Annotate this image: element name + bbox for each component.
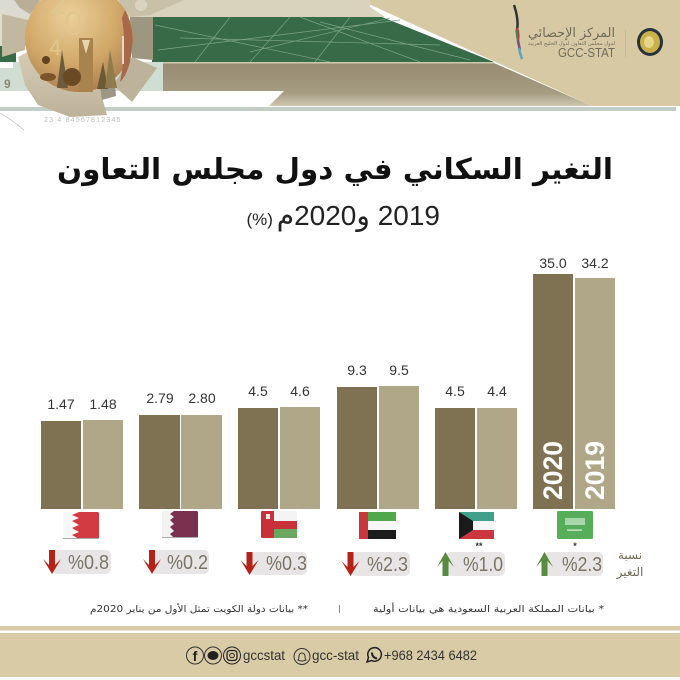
flag: Saudi Arabia bbox=[557, 511, 593, 539]
change: Oman bbox=[240, 552, 307, 575]
bar chart bbox=[41, 255, 615, 509]
bars: Oman: 4.6 bbox=[290, 383, 310, 399]
change: Qatar bbox=[143, 550, 209, 574]
asterisk: Kuwait: ** bbox=[475, 541, 483, 551]
bars: Kuwait: 4.4 bbox=[487, 383, 507, 399]
icon: facebook: f bbox=[193, 648, 198, 664]
footnote: Saudi Arabia: * بيانات المملكة العربية السعودية هي بيانات أولية bbox=[373, 602, 604, 615]
change: Bahrain bbox=[43, 550, 111, 574]
bars: Saudi Arabia: 35.0 bbox=[539, 255, 567, 271]
bars: Kuwait: 4.5 bbox=[445, 383, 465, 399]
change: Kuwait: %1.0 bbox=[463, 554, 503, 576]
flag: Qatar bbox=[162, 511, 198, 538]
change: Qatar: %0.2 bbox=[167, 552, 208, 574]
bars: UAE bbox=[337, 362, 419, 509]
header banner bbox=[0, 0, 680, 130]
bars: Bahrain: 1.47 bbox=[47, 396, 75, 412]
subtitle: 2019 و2020م (%) bbox=[247, 200, 440, 232]
icon: facebook bbox=[186, 647, 204, 664]
footer band bbox=[0, 633, 680, 677]
bars: Saudi Arabia bbox=[533, 255, 615, 509]
bars: Saudi Arabia: 34.2 bbox=[581, 255, 609, 271]
change rate label bbox=[616, 548, 643, 580]
asterisk: Saudi Arabia: * bbox=[573, 541, 577, 551]
logo: GCC-STAT: لدول مجلس التعاون لدول الخليج العربية bbox=[528, 41, 615, 47]
bars: Bahrain bbox=[41, 396, 123, 509]
logo: GCC-STAT: GCC-STAT bbox=[558, 45, 615, 60]
footnote: Kuwait: ** بيانات دولة الكويت تمثل الأول من يناير 2020م bbox=[90, 603, 308, 615]
bars: Bahrain: 1.48 bbox=[89, 396, 117, 412]
flag: Bahrain bbox=[63, 512, 99, 539]
bars: UAE: 9.5 bbox=[389, 362, 409, 378]
flag: UAE bbox=[359, 512, 396, 539]
bars: Qatar: 2.80 bbox=[188, 390, 216, 406]
change: Kuwait bbox=[437, 552, 505, 576]
change: Saudi Arabia bbox=[536, 552, 603, 576]
change rate label: نسبة bbox=[618, 548, 642, 562]
title: التغير السكاني في دول مجلس التعاون bbox=[57, 152, 613, 186]
bars: Kuwait bbox=[435, 383, 517, 509]
flag: Kuwait bbox=[459, 512, 494, 539]
year label 2019: 2019 bbox=[580, 441, 610, 500]
header banner: 0 bbox=[64, 5, 83, 43]
change rate label: التغير bbox=[616, 565, 643, 580]
header banner: 23 4 84567812345 bbox=[44, 117, 122, 124]
bars: Oman bbox=[238, 383, 320, 509]
change: Bahrain: %0.8 bbox=[68, 552, 109, 574]
bars: Oman: 4.5 bbox=[248, 383, 268, 399]
icon: snapchat bbox=[294, 648, 310, 664]
bars: Qatar: 2.79 bbox=[146, 390, 174, 406]
phone number: +968 2434 6482 bbox=[384, 647, 477, 663]
bars: Qatar bbox=[139, 390, 222, 509]
change: UAE: %2.3 bbox=[367, 554, 408, 576]
bars: UAE: 9.3 bbox=[347, 362, 367, 378]
handle: gcc-stat: gcc-stat bbox=[312, 647, 359, 663]
icon: instagram bbox=[224, 647, 240, 664]
header banner: 4 bbox=[49, 35, 61, 60]
header banner: 9 bbox=[4, 77, 11, 91]
handle: gccstat: gccstat bbox=[243, 647, 285, 663]
change: Oman: %0.3 bbox=[266, 553, 307, 575]
logo: GCC-STAT: المركز الإحصائي bbox=[528, 26, 615, 41]
change: UAE bbox=[342, 552, 410, 576]
change: Saudi Arabia: %2.3 bbox=[562, 554, 602, 576]
flag: Oman bbox=[261, 511, 297, 538]
year label 2020: 2020 bbox=[538, 441, 568, 500]
icon: whatsapp bbox=[367, 648, 381, 662]
icon: twitter bbox=[204, 647, 222, 664]
logo: GCC-STAT bbox=[514, 5, 663, 60]
